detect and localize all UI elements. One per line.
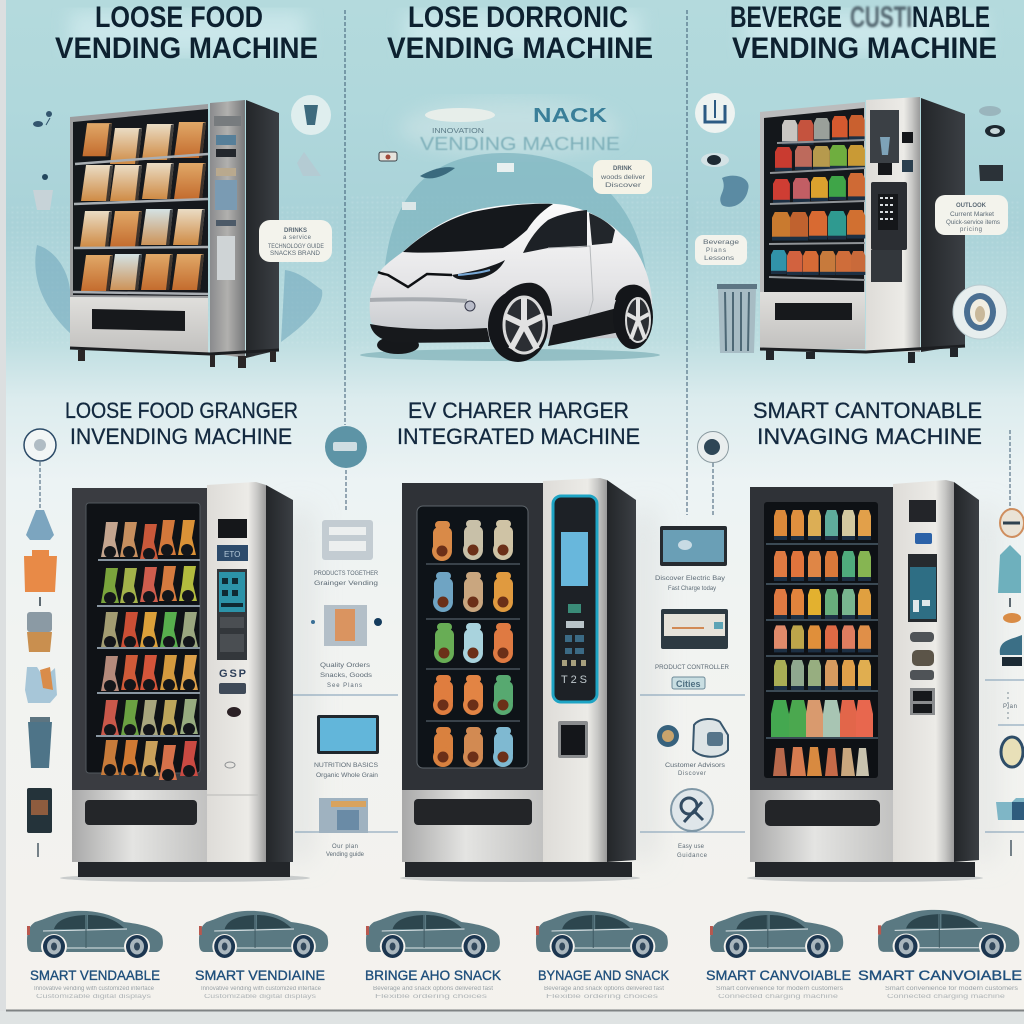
callout: right details: pricing xyxy=(960,227,982,233)
bottom row: car 6: Smart convenience for modern customers xyxy=(885,986,1018,992)
feature caption xyxy=(655,576,725,592)
feature: control box xyxy=(322,520,373,560)
icon: leaf mark xyxy=(420,167,455,178)
icon: tiny mark xyxy=(402,202,416,210)
callout: machine details: a service xyxy=(283,235,312,241)
shelves of snack packs xyxy=(769,115,865,280)
bottom page edge xyxy=(0,1010,1024,1024)
heading: EV charger: EV CHARER HARGER xyxy=(408,398,629,423)
heading: column one xyxy=(55,1,318,65)
icon: eye label xyxy=(701,153,729,167)
feature caption: NUTRITION BASICS xyxy=(314,763,378,769)
callout: snack details: woods deliver xyxy=(600,175,645,181)
icon: top left droplet xyxy=(33,111,52,127)
feature caption xyxy=(677,844,708,859)
feature caption: Vending guide xyxy=(326,852,365,858)
panel: EV charger machine (lower) xyxy=(400,432,730,882)
control panel xyxy=(217,519,248,768)
bottom row: car 5: Smart convenience for modern customers xyxy=(716,986,843,992)
feature caption xyxy=(665,763,725,777)
icon: camera badge xyxy=(698,432,728,462)
callout: machine details: DRINKS xyxy=(284,228,307,234)
feature: monitor xyxy=(660,526,727,566)
feature: cities badge: Cities xyxy=(676,679,701,689)
feature: charger dock xyxy=(661,609,728,649)
heading: smart customizable: INVAGING MACHINE xyxy=(757,424,982,449)
callout: right details: OUTLOOK xyxy=(956,203,987,209)
payment slot xyxy=(558,721,588,758)
icon: funnel xyxy=(297,152,321,176)
callout: snack details: Discover xyxy=(605,183,641,189)
feature caption xyxy=(314,571,379,587)
ghost text: vending machine: VENDING MACHINE xyxy=(420,134,620,154)
bottom row: car 6: SMART CANVOIABLE xyxy=(858,967,1022,983)
heading underlines xyxy=(65,461,968,463)
decorative leaves xyxy=(35,245,322,342)
bottom row: car 4: BYNAGE AND SNACK xyxy=(538,967,670,983)
icon: charge port and plug xyxy=(657,719,728,757)
bottom row: car 5: SMART CANVOIABLE xyxy=(706,967,851,983)
bottom row: car 3: Flexible ordering choices xyxy=(375,994,487,1000)
ghost text: small caption: INNOVATION xyxy=(432,128,484,135)
icon: small label xyxy=(497,163,514,172)
icon: bucket xyxy=(33,174,53,210)
icon: location badge xyxy=(953,285,1007,339)
feature caption: Organic Whole Grain xyxy=(316,773,378,779)
feature: product photo xyxy=(311,605,382,646)
heading: column three: BEVERGE xyxy=(730,1,842,34)
feature caption: PRODUCT CONTROLLER xyxy=(655,665,730,671)
panel: loose food vending machine (top) xyxy=(33,95,332,368)
wrapped snack rows xyxy=(96,520,200,781)
icon: recycling blob xyxy=(720,176,749,207)
feature caption: Discover Electric Bay xyxy=(655,576,725,582)
ghost logo ellipse xyxy=(425,108,495,122)
icon column: right side xyxy=(996,509,1024,856)
panel divider lines xyxy=(40,10,1010,515)
note: left callout: Plans xyxy=(706,248,726,254)
bottom row: car 6 xyxy=(858,910,1022,1000)
bottom row: car 4: Beverage and snack options delivered fast xyxy=(544,986,664,992)
callout: right details: Quick-service items xyxy=(946,220,1000,226)
control panel xyxy=(908,500,937,715)
feature caption: Snacks, Goods xyxy=(320,673,372,679)
feature caption xyxy=(320,663,372,689)
heading: column one: LOOSE FOOD xyxy=(95,1,263,34)
icon: teal charger badge xyxy=(325,426,367,468)
icon: left ring badge xyxy=(24,429,56,461)
panel: beverage sustainable vending machine (top) xyxy=(695,93,1008,363)
bottom row: car 4: Flexible ordering choices xyxy=(546,994,658,1000)
machine body xyxy=(747,480,983,882)
icon: right column marks xyxy=(979,106,1005,181)
callout: machine details: TECHNOLOGY GUIDE xyxy=(268,244,324,250)
control panel with blue trim: T2S xyxy=(561,674,587,686)
heading: loose food granger: INVENDING MACHINE xyxy=(70,424,292,449)
heading: EV charger: INTEGRATED MACHINE xyxy=(397,424,640,449)
callout: right details: Current Market xyxy=(950,212,994,218)
bottom row: car 1: Innovative vending with customized interface xyxy=(34,986,155,992)
feature: touch screen xyxy=(317,715,379,754)
callout: snack details: DRINK xyxy=(613,166,633,172)
feature caption: Quality Orders xyxy=(320,663,370,669)
feature caption xyxy=(314,763,378,779)
icon column: left products xyxy=(24,510,57,857)
bottom row: car 2: Innovative vending with customized interface xyxy=(201,986,322,992)
machine body xyxy=(60,482,310,882)
callout: machine details xyxy=(259,220,332,262)
icon: round symbol xyxy=(671,789,713,831)
icon: round cup badge xyxy=(291,95,331,135)
backdrop dome xyxy=(383,153,648,295)
bottom row: car 5: Connected charging machine xyxy=(718,994,839,1000)
note: left callout: Beverage xyxy=(703,240,740,246)
heading: EV charger xyxy=(397,398,640,449)
control panel with blue trim xyxy=(553,496,597,702)
bottom row: car 4 xyxy=(536,911,670,1000)
callout: right details xyxy=(935,195,1008,235)
feature caption: See Plans xyxy=(327,683,362,689)
electric car xyxy=(360,203,660,362)
feature: cities badge xyxy=(672,677,705,689)
feature caption: Customer Advisors xyxy=(665,763,725,769)
bottom row: car 3: Beverage and snack options delivered fast xyxy=(373,986,493,992)
icon: small glasses xyxy=(379,152,397,161)
feature caption: Fast Charge today xyxy=(668,586,716,592)
ghost haze behind lettering xyxy=(400,100,620,156)
feature caption: Guidance xyxy=(677,853,708,859)
bottom row: car 1: SMART VENDAABLE xyxy=(30,967,160,983)
heading: column one: VENDING MACHINE xyxy=(55,32,318,65)
feature caption: Grainger Vending xyxy=(314,581,378,587)
bottom row: car 6: Connected charging machine xyxy=(887,994,1006,1000)
title glow xyxy=(70,12,985,54)
bottom row: car 3 xyxy=(365,911,502,1000)
heading: loose food granger: LOOSE FOOD GRANGER xyxy=(65,398,298,423)
bottom row: car 3: BRINGE AHO SNACK xyxy=(365,967,502,983)
feature caption: PRODUCTS TOGETHER xyxy=(314,571,379,577)
icon column: right side: Plan xyxy=(1003,704,1017,710)
heading: column two: LOSE DORRONIC xyxy=(408,1,628,34)
shelves of loose food bags xyxy=(73,122,208,294)
feature caption xyxy=(326,844,365,858)
ghost text: snack: NACK xyxy=(533,105,608,127)
machine controls and keypad xyxy=(870,110,913,282)
heading: column three xyxy=(730,1,997,65)
callout: snack details xyxy=(593,160,652,194)
column separator lines xyxy=(293,680,1024,832)
machine shadow glow xyxy=(286,510,994,860)
icon: trash can xyxy=(717,284,757,353)
bottom row: car 2 xyxy=(195,911,328,1000)
bottom row: car 1: Customizable digital displays xyxy=(36,994,151,1000)
heading: column three: CUSTI xyxy=(850,1,912,34)
heading: smart customizable: SMART CANTONABLE xyxy=(753,398,982,423)
note: left callout xyxy=(695,235,747,265)
icon: circular badge xyxy=(695,93,735,133)
bottle rows xyxy=(426,520,520,767)
heading: column two: VENDING MACHINE xyxy=(387,32,653,65)
panel: EV compact car (top) xyxy=(360,100,660,362)
control panel: ETO xyxy=(224,550,240,559)
bottom row: car 1 xyxy=(27,911,163,1000)
heading: column three: VENDING MACHINE xyxy=(732,32,997,65)
heading: loose food granger xyxy=(65,398,298,449)
machine body xyxy=(760,97,965,363)
machine control strip xyxy=(214,116,241,280)
feature caption: Discover xyxy=(678,771,706,777)
left page edge xyxy=(0,0,6,1024)
feature caption: Our plan xyxy=(332,844,358,850)
bottom row: car 5 xyxy=(706,911,851,1000)
bottom row: car 2: SMART VENDIAINE xyxy=(195,967,325,983)
callout: machine details: SNACKS BRAND xyxy=(270,251,321,257)
feature caption: Easy use xyxy=(678,844,705,850)
heading: column three: NABLE xyxy=(912,1,990,34)
feature: dispenser photo xyxy=(319,798,368,833)
halftone texture xyxy=(8,195,1020,350)
drink rows xyxy=(766,510,878,776)
heading: smart customizable xyxy=(753,398,982,449)
panel: smart customizable machine (lower) xyxy=(747,480,1024,882)
control panel: GSP xyxy=(219,668,246,680)
panel: loose food machine (lower) xyxy=(24,426,382,882)
machine body xyxy=(70,100,279,368)
machine body xyxy=(400,478,640,882)
bottom row: car 2: Customizable digital displays xyxy=(204,994,316,1000)
note: left callout: Lessons xyxy=(704,256,734,262)
heading: column two xyxy=(387,1,653,65)
